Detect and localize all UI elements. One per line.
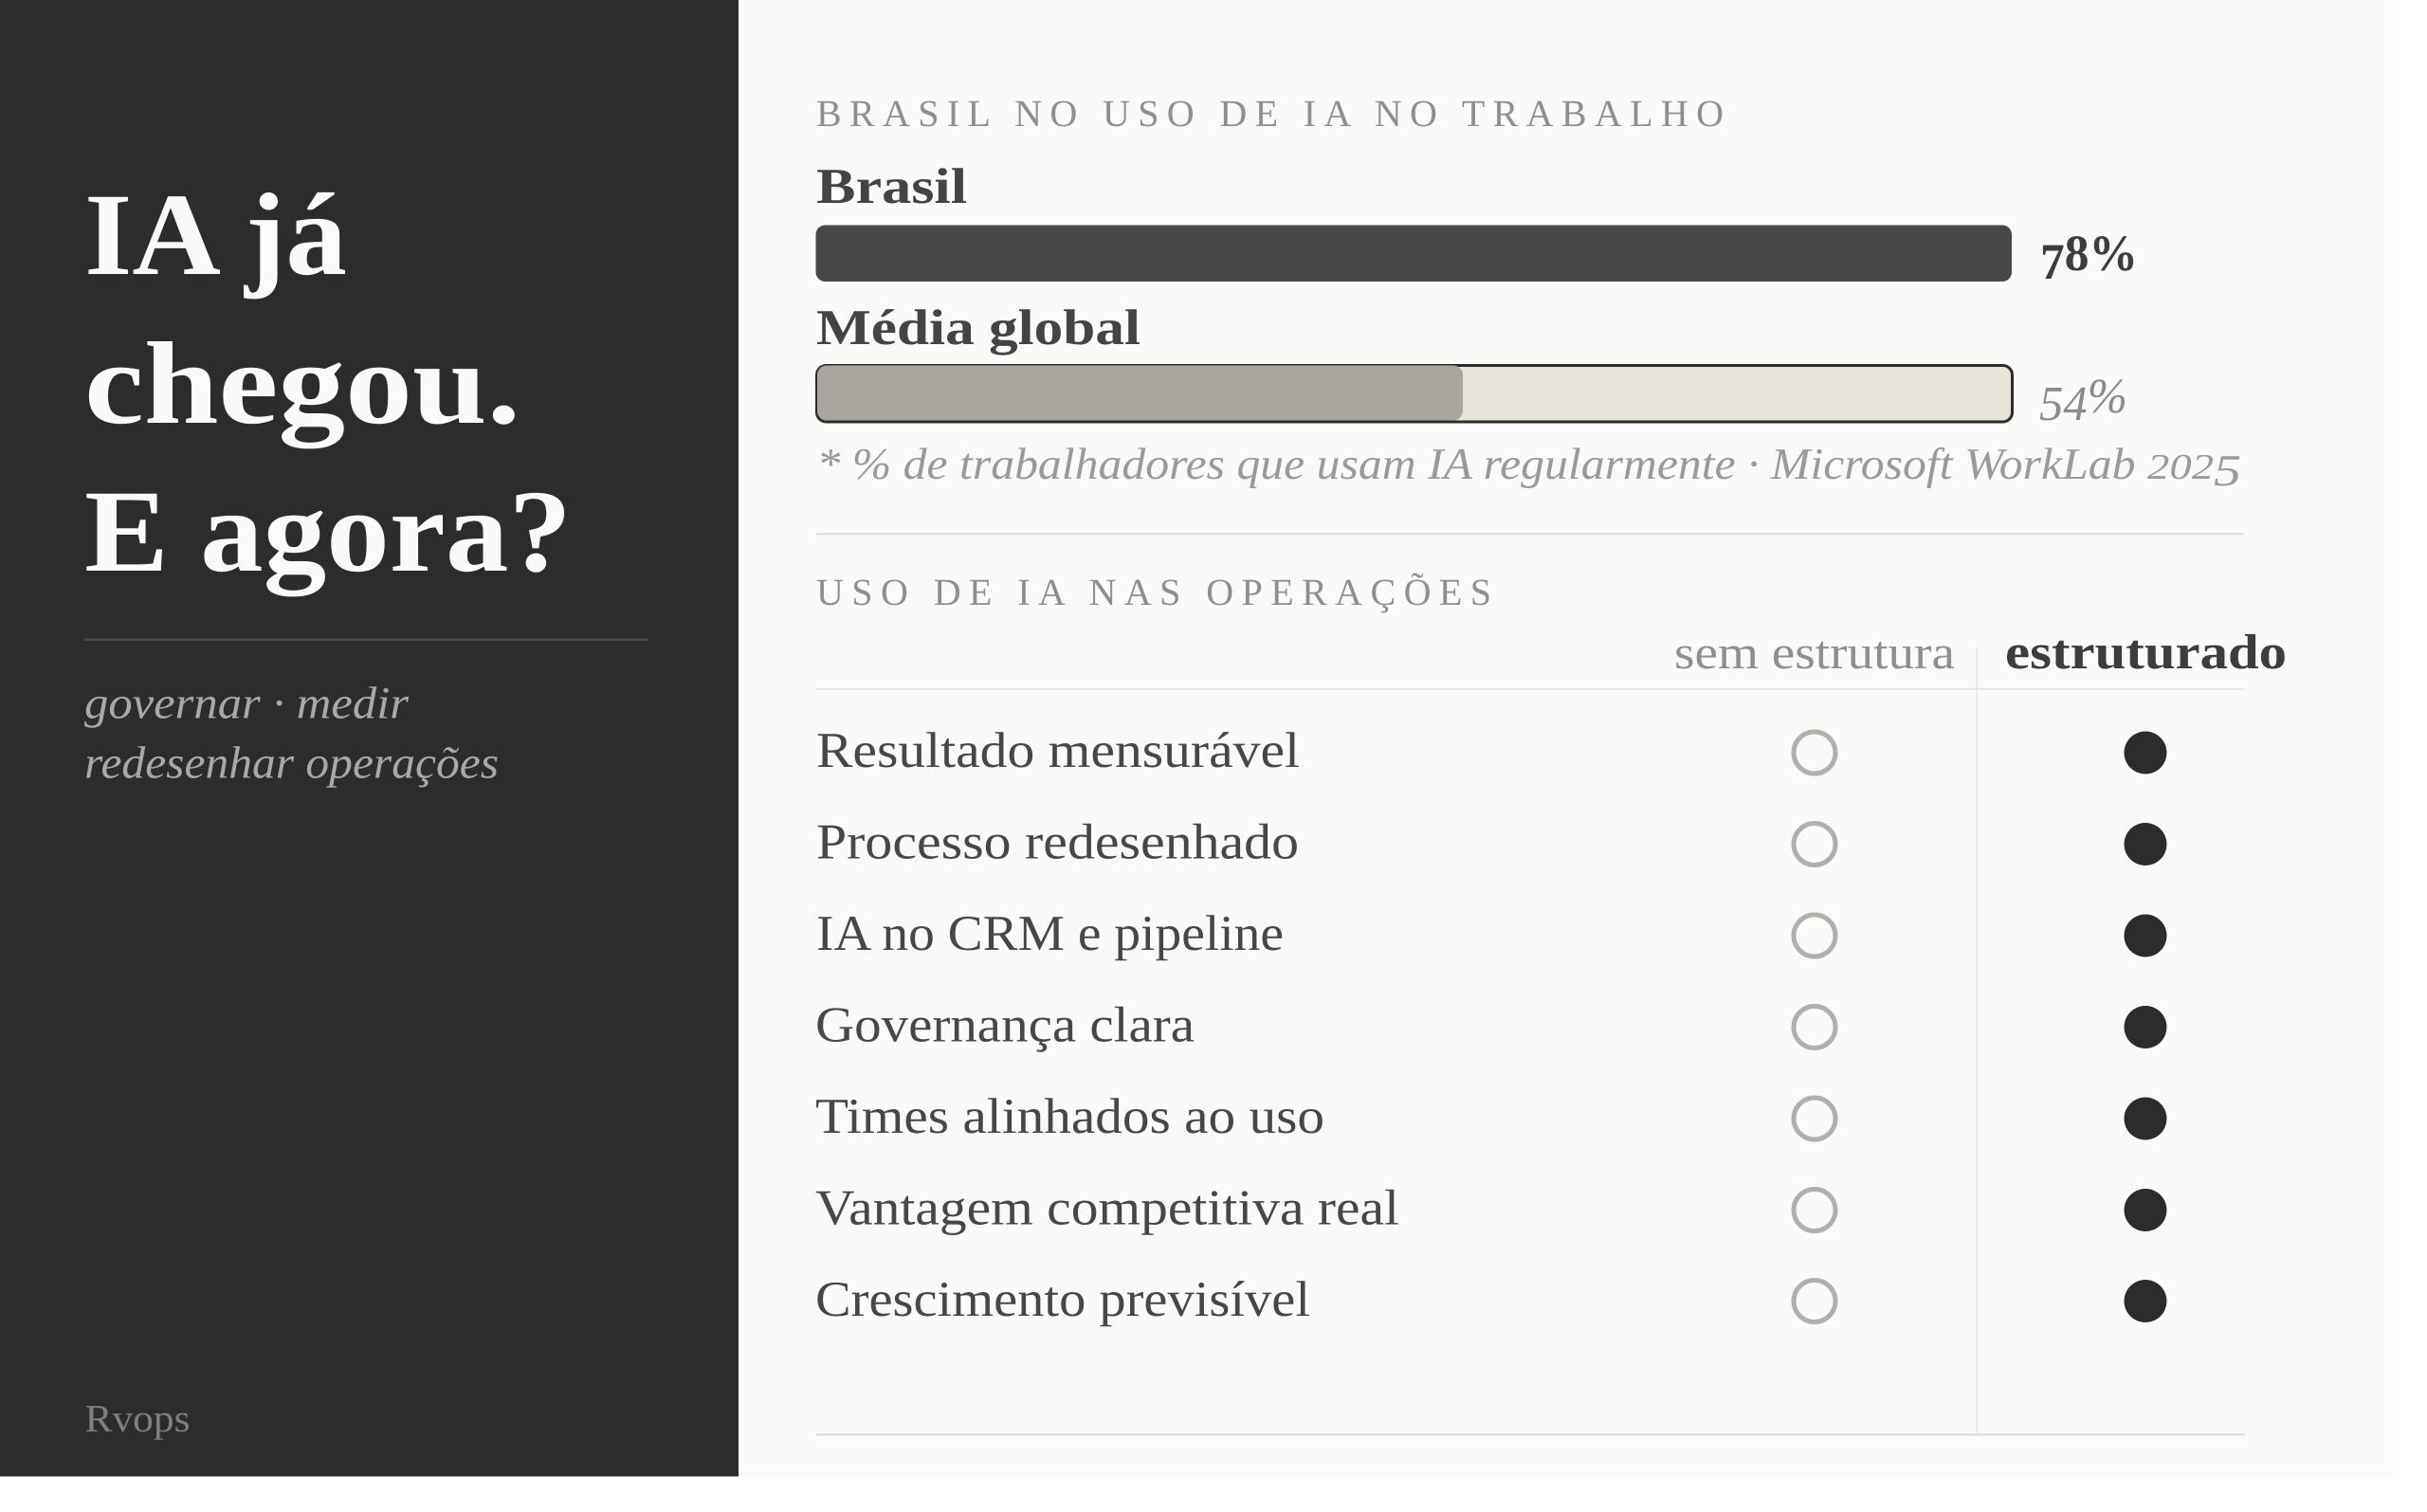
bar label: Brasil: Brasil: [816, 159, 967, 214]
row labels: Vantagem competitiva real: [815, 1181, 1399, 1236]
row labels: [815, 723, 1399, 1327]
subtitle: redesenhar operações: [84, 738, 499, 789]
column header: sem estrutura: sem estrutura: [1674, 626, 1955, 679]
section heading: Brasil no uso de IA: BRASIL NO USO DE IA NO TRABALHO: [816, 92, 1724, 135]
open circles: sem estrutura column: [1794, 732, 1835, 1321]
bar: Brasil 78%: [815, 226, 2012, 282]
subtitle: governar · medir: [84, 679, 409, 728]
title: [84, 170, 572, 597]
row labels: Processo redesenhado: [816, 815, 1299, 870]
title: IA já: [84, 170, 347, 300]
row labels: Resultado mensurável: [816, 723, 1300, 778]
row labels: Crescimento previsível: [815, 1272, 1310, 1327]
value: 78%: 8%: [2065, 225, 2138, 282]
bar: Média global 54%: [817, 366, 2012, 422]
brand label: Rvops: [85, 1396, 190, 1440]
row labels: Governança clara: [815, 997, 1195, 1052]
panel: Brazil AI usage bars: [815, 92, 2241, 496]
section heading: Uso de IA nas operações: USO DE IA NAS OPERAÇÕES: [816, 571, 1491, 613]
value: 54%: 54: [2039, 377, 2088, 431]
panel: left title sidebar: [0, 0, 739, 1477]
title: E agora?: [84, 466, 572, 597]
footnote: 5: [2214, 446, 2241, 496]
bar label: Média global: Média global: [816, 301, 1141, 355]
row labels: Times alinhados ao uso: [815, 1089, 1324, 1144]
filled circles: estruturado column: [2124, 732, 2167, 1322]
footnote: 202: [2147, 447, 2201, 487]
row labels: IA no CRM e pipeline: [816, 906, 1284, 961]
title: chegou.: [84, 319, 520, 449]
panel: AI in operations comparison table: [815, 571, 2287, 1435]
footnote: * % de trabalhadores que usam IA regularmente · Microsoft WorkLab: [817, 440, 2135, 489]
column header: estruturado: estruturado: [2005, 626, 2287, 680]
subtitle: [84, 679, 499, 789]
value: 78%: 7: [2040, 233, 2065, 290]
value: 54%: %: [2088, 370, 2127, 424]
